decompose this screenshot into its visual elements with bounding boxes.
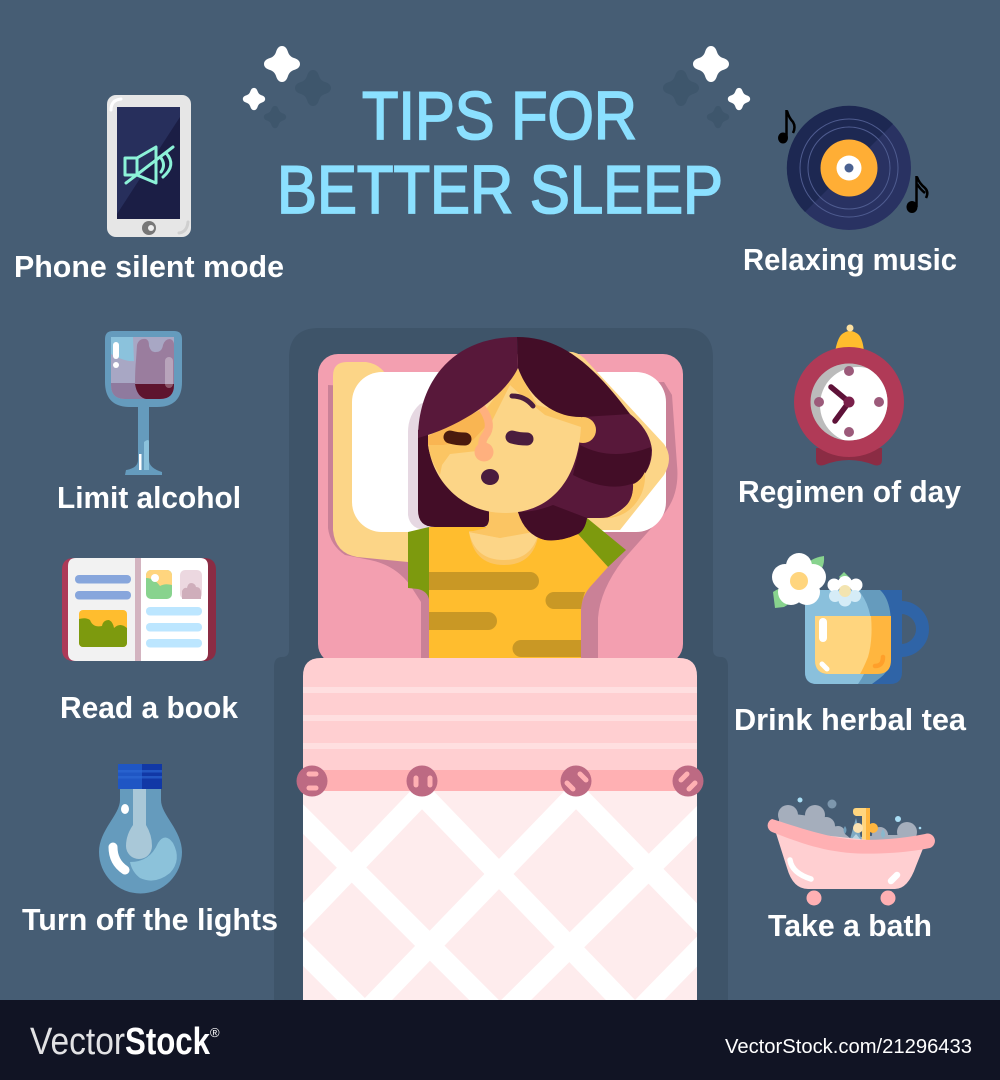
footer logo: ®: [210, 1025, 220, 1040]
footer logo: [30, 1021, 220, 1063]
icon: alarm clock: [794, 324, 904, 465]
blanket lattice: [303, 791, 697, 1000]
hair: lower tip: [518, 505, 587, 540]
bath rim: [768, 819, 935, 854]
label: turn off the lights: Turn off the lights: [22, 902, 278, 937]
flower: small: [828, 572, 862, 606]
bath body: [775, 830, 924, 889]
label: read a book: Read a book: [60, 690, 239, 725]
icon: book: [62, 558, 216, 661]
label: drink herbal tea: Drink herbal tea: [734, 702, 967, 737]
icon: herbal tea mug: [772, 553, 922, 684]
face: [428, 360, 581, 513]
sleeve: left: [408, 527, 429, 599]
nose: [482, 408, 489, 452]
arm: left: [333, 362, 408, 562]
arm: right raised: [530, 352, 669, 530]
eye: left: [450, 437, 465, 439]
mouth: [481, 469, 499, 485]
label: relaxing music: Relaxing music: [743, 242, 957, 277]
label: regimen of day: Regimen of day: [738, 474, 962, 509]
hair shadow on pillow: [408, 400, 430, 530]
icon: vinyl record: [787, 106, 911, 230]
title: [277, 78, 723, 228]
icon: phone silent: [107, 95, 191, 237]
bed frame: [274, 328, 728, 1000]
body shadow: [328, 382, 677, 658]
shirt: [429, 527, 608, 658]
mattress: [318, 354, 683, 664]
bath feet: [806, 890, 822, 906]
collar and neck: [469, 531, 539, 565]
title: BETTER SLEEP: [277, 152, 723, 228]
label: phone silent mode: Phone silent mode: [14, 249, 284, 284]
sleeve: right: [577, 518, 626, 567]
icon: music note left: [778, 110, 794, 144]
icon: light bulb: [99, 764, 182, 893]
hair: back right: [518, 405, 652, 540]
label: limit alcohol: Limit alcohol: [57, 480, 241, 515]
footer image id: VectorStock.com/21296433: [725, 1036, 972, 1058]
hand shade: [600, 472, 645, 518]
footer bar: [0, 1000, 1000, 1080]
hair: front right: [517, 337, 630, 417]
blanket upper fold: [303, 658, 697, 772]
footer logo: Vector: [30, 1021, 125, 1063]
label: take a bath: Take a bath: [768, 908, 932, 943]
flower: large: [772, 553, 826, 608]
footer logo: Stock: [125, 1021, 211, 1063]
hair: back left: [418, 420, 489, 527]
buttons: [296, 766, 704, 796]
eyebrow: [512, 396, 533, 406]
icon: music note right: [906, 176, 927, 213]
face shading: [428, 368, 581, 475]
blanket band: [303, 770, 697, 791]
bath foam: [778, 805, 917, 846]
shirt stripes: [429, 572, 585, 657]
icon: bathtub: [768, 798, 935, 906]
ear: [570, 417, 596, 443]
sleeping woman: [328, 337, 677, 658]
eye: right: [512, 437, 527, 439]
hair: dark band: [573, 445, 651, 487]
hair: front left: [418, 337, 518, 438]
icon: wine glass: [105, 331, 182, 475]
sparkles decoration: [243, 46, 750, 128]
blanket: [296, 658, 704, 1000]
faucet: [853, 808, 870, 842]
pillow: [352, 372, 666, 532]
title: TIPS FOR: [362, 78, 637, 154]
